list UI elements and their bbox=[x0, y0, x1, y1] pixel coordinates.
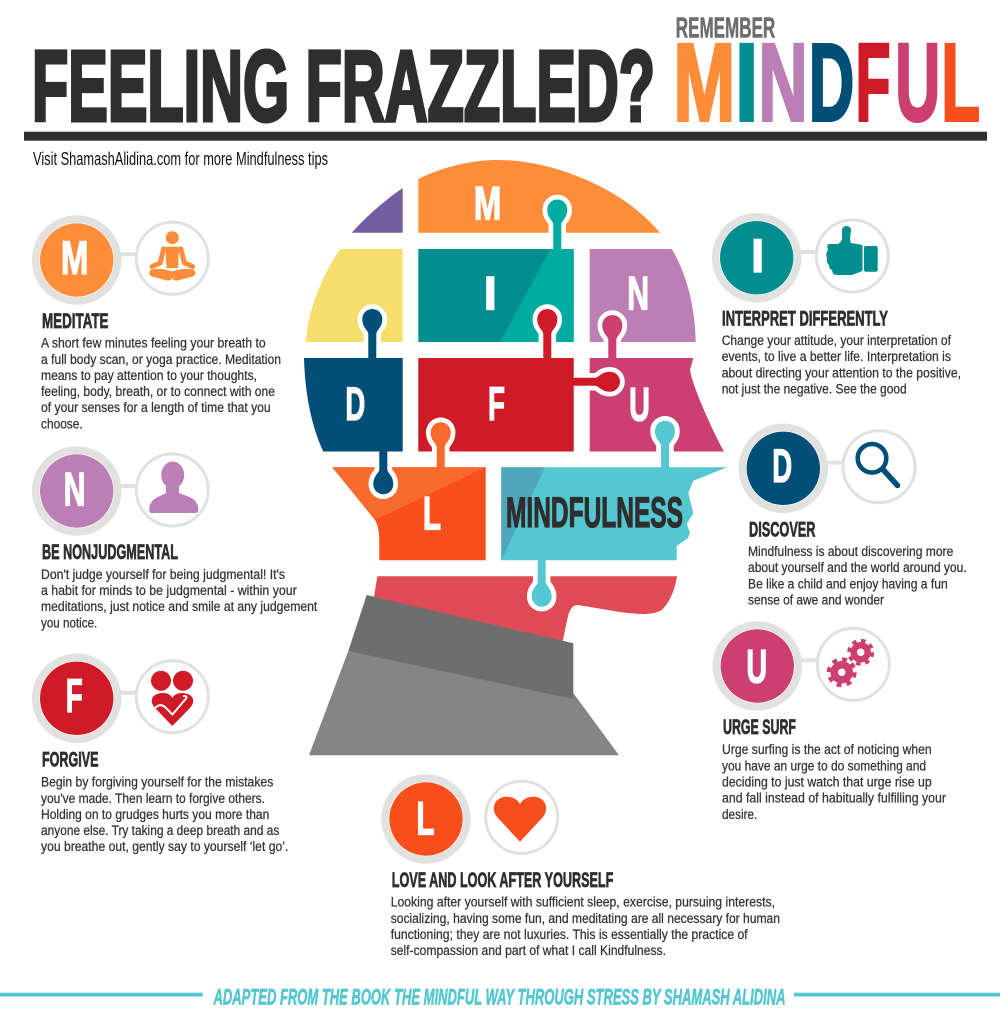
wordmark: MINDFUL: F bbox=[856, 22, 890, 144]
icon: gears bbox=[817, 628, 889, 700]
tab: U into N bbox=[602, 315, 622, 359]
body text bbox=[722, 333, 961, 397]
piece: D bbox=[304, 358, 403, 452]
letter badge F bbox=[36, 657, 118, 739]
icon: magnifying glass bbox=[843, 431, 915, 503]
heading: DISCOVER bbox=[749, 517, 816, 541]
body text bbox=[41, 336, 281, 431]
piece: D: D bbox=[345, 377, 365, 430]
body text: choose. bbox=[41, 416, 83, 431]
wordmark: MINDFUL: M bbox=[673, 22, 735, 144]
body text: A short few minutes feeling your breath to bbox=[41, 336, 266, 351]
face panel: Mindfulness bbox=[501, 467, 727, 560]
body text bbox=[722, 742, 946, 822]
piece: I bbox=[418, 249, 574, 342]
wordmark: MINDFUL: D bbox=[809, 22, 854, 144]
heading: INTERPRET DIFFERENTLY bbox=[722, 307, 888, 331]
letter badge I: I bbox=[751, 229, 764, 282]
connector bbox=[120, 252, 137, 256]
letter badge N: N bbox=[64, 462, 86, 516]
letter badge D: D bbox=[772, 439, 792, 492]
subtitle: Remember: REMEMBER bbox=[676, 13, 775, 45]
body text: about yourself and the world around you. bbox=[748, 560, 967, 575]
piece: yellow bbox=[306, 249, 403, 342]
connector bbox=[827, 461, 844, 465]
body text: Holding on to grudges hurts you more than bbox=[41, 807, 269, 822]
tab: D into L bbox=[373, 450, 393, 494]
letter badge D bbox=[742, 427, 824, 509]
letter badge U bbox=[716, 625, 798, 707]
body text: desire. bbox=[722, 807, 757, 822]
body text: self-compassion and part of what I call Kindfulness. bbox=[391, 943, 666, 958]
panel: Discover bbox=[742, 427, 967, 608]
letter badge M bbox=[36, 219, 118, 301]
neck bbox=[374, 576, 677, 641]
wordmark: MINDFUL: I bbox=[735, 22, 758, 144]
panel: Interpret Differently bbox=[716, 217, 961, 397]
body text: about directing your attention to the positive, bbox=[722, 365, 961, 380]
body text: meditations, just notice and smile at any judgement bbox=[41, 599, 318, 614]
header rule bbox=[24, 132, 987, 141]
body text bbox=[41, 567, 318, 630]
body text: events, to live a better life. Interpretation is bbox=[722, 349, 951, 364]
tab: L into F bbox=[431, 422, 451, 468]
shoulders bbox=[309, 651, 619, 755]
heading: BE NONJUDGMENTAL bbox=[42, 540, 178, 564]
letter badge U: U bbox=[746, 640, 767, 692]
tab: D into yellow bbox=[362, 309, 382, 359]
icon: two people and heart bbox=[136, 661, 208, 733]
heading: MEDITATE bbox=[42, 309, 108, 333]
body text: you notice. bbox=[41, 615, 97, 630]
heading: LOVE AND LOOK AFTER YOURSELF bbox=[392, 868, 613, 892]
panel: Urge Surf bbox=[716, 625, 946, 822]
piece: L: L bbox=[423, 486, 441, 540]
icon: meditating figure bbox=[136, 222, 208, 294]
body text: a full body scan, or yoga practice. Meditation bbox=[41, 352, 281, 367]
body text: sense of awe and wonder bbox=[748, 593, 884, 608]
body text: anyone else. Try taking a deep breath and as bbox=[41, 823, 280, 838]
connector bbox=[120, 484, 137, 488]
panel: Forgive bbox=[36, 657, 288, 854]
icon: heart bbox=[486, 781, 558, 853]
icon: person bbox=[136, 454, 208, 526]
letter badge N bbox=[36, 450, 118, 532]
letter badge F: F bbox=[66, 669, 83, 722]
connector bbox=[801, 658, 818, 662]
body text: deciding to just watch that urge rise up bbox=[722, 775, 932, 790]
piece: I: I bbox=[484, 266, 497, 320]
body text: Don't judge yourself for being judgmental! It's bbox=[41, 567, 285, 582]
tab: Mindfulness into neck bbox=[532, 559, 552, 607]
body text: Mindfulness is about discovering more bbox=[748, 544, 953, 559]
connector bbox=[800, 250, 817, 254]
body text: you have an urge to do something and bbox=[722, 758, 926, 773]
body text bbox=[41, 775, 288, 854]
face panel: Mindfulness: MINDFULNESS bbox=[506, 490, 683, 537]
letter badge I bbox=[716, 217, 798, 299]
piece: M bbox=[418, 160, 660, 233]
panel: Love and Look After Yourself bbox=[385, 778, 780, 958]
tab: F into I bbox=[537, 309, 557, 359]
panel: Meditate bbox=[36, 219, 281, 431]
body text bbox=[748, 544, 967, 608]
letter badge M: M bbox=[61, 231, 88, 284]
panel: Be Nonjudgmental bbox=[36, 450, 318, 630]
collar bbox=[348, 595, 573, 699]
body text: Begin by forgiving yourself for the mistakes bbox=[41, 775, 274, 790]
body text: you breathe out, gently say to yourself ‘let go’. bbox=[41, 839, 288, 854]
tab: F into U bbox=[573, 372, 620, 392]
tab: I into M bbox=[547, 200, 567, 250]
body text: of your senses for a length of time that you bbox=[41, 400, 271, 415]
heading: FORGIVE bbox=[42, 747, 98, 771]
wordmark: MINDFUL bbox=[673, 22, 980, 144]
body text: not just the negative. See the good bbox=[722, 382, 907, 397]
website note: Visit ShamashAlidina.com for more Mindfulness tips bbox=[33, 149, 328, 169]
body text: socializing, having some fun, and meditating are all necessary for human bbox=[391, 911, 780, 926]
body text: Urge surfing is the act of noticing when bbox=[722, 742, 932, 757]
body text: means to pay attention to your thoughts, bbox=[41, 368, 257, 383]
body text: Be like a child and enjoy having a fun bbox=[748, 576, 948, 591]
connector bbox=[120, 691, 137, 695]
piece: L bbox=[332, 467, 486, 560]
body text: feeling, body, breath, or to connect with one bbox=[41, 384, 275, 399]
icon: thumbs up bbox=[816, 220, 888, 292]
piece: F: F bbox=[488, 377, 505, 430]
body text: functioning; they are not luxuries. This is essentially the practice of bbox=[391, 927, 748, 942]
piece: M: M bbox=[474, 176, 501, 230]
wordmark: MINDFUL: N bbox=[758, 22, 808, 144]
piece: N bbox=[590, 249, 696, 342]
piece: U bbox=[590, 358, 724, 452]
wordmark: MINDFUL: U bbox=[895, 22, 940, 144]
body text: and fall instead of habitually fulfilling your bbox=[722, 791, 946, 806]
piece: U: U bbox=[629, 378, 650, 430]
tab: Mindfulness into U bbox=[655, 421, 675, 469]
piece: purple corner bbox=[352, 188, 403, 233]
body text: Change your attitude, your interpretation of bbox=[722, 333, 951, 348]
piece: N: N bbox=[627, 266, 649, 320]
body text: you've made. Then learn to forgive others. bbox=[41, 791, 265, 806]
heading: URGE SURF bbox=[723, 715, 796, 739]
body text bbox=[391, 895, 780, 958]
piece: F bbox=[418, 358, 574, 452]
body text: Looking after yourself with sufficient sleep, exercise, pursuing interests, bbox=[391, 895, 775, 910]
letter badge L bbox=[385, 778, 467, 860]
head illustration: puzzle brain bbox=[304, 160, 727, 755]
letter badge L: L bbox=[416, 792, 435, 844]
body text: a habit for minds to be judgmental - within your bbox=[41, 583, 297, 598]
